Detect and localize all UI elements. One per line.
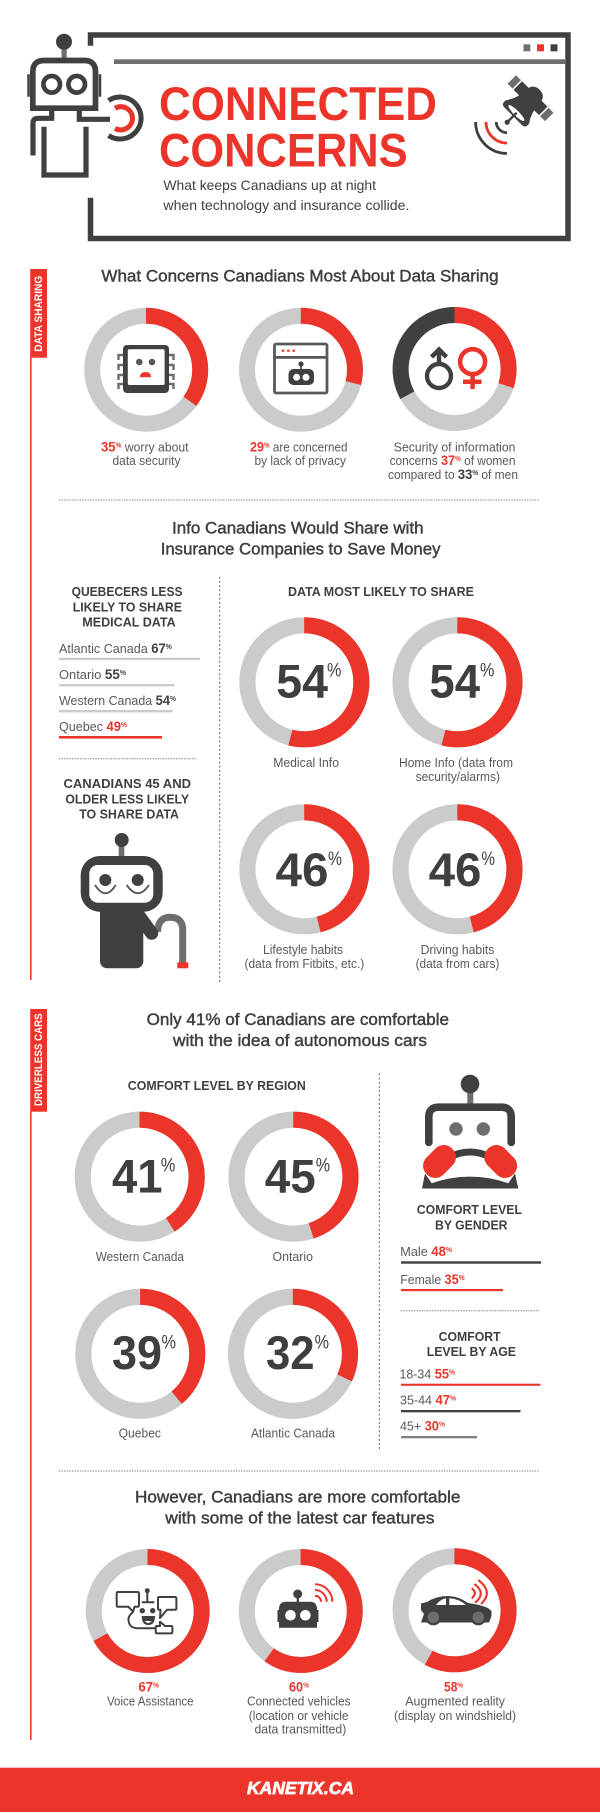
heading: info canadians would share: [161, 518, 441, 558]
caption: are concerned: [270, 439, 348, 454]
caption: 60: [289, 1680, 304, 1695]
subheading: [72, 585, 182, 629]
bar: western canada: Western Canada 54: [59, 693, 171, 708]
bar: ontario: Ontario 55: [59, 667, 120, 682]
stat: western canada 41%: [83, 1120, 197, 1264]
caption: 67: [138, 1680, 154, 1695]
stat: ontario 45%: 45: [265, 1149, 316, 1202]
subtitle: when technology and insurance collide.: [162, 197, 409, 213]
section tab: driverless cars: [30, 1009, 47, 1740]
stat: lifestyle habits 46%: 46: [276, 843, 328, 896]
stat: ontario 45%: [236, 1120, 350, 1264]
caption: 29: [250, 438, 264, 454]
caption: Security of information: [394, 439, 516, 454]
bar: 18-34: 18-34 55: [400, 1367, 450, 1382]
section tab: data sharing: [30, 269, 47, 980]
bar: ontario: [59, 667, 174, 686]
bar: 45+: [400, 1419, 477, 1438]
stat: driving habits 46%: (data from cars): [416, 956, 499, 971]
caption: by lack of privacy: [254, 453, 346, 468]
heading: info canadians would share: Info Canadians Would Share with: [172, 518, 424, 537]
title: CONCERNS: [159, 124, 408, 177]
stat: home info 54%: Home Info (data from: [399, 755, 513, 770]
panel: quebecers medical data: [59, 585, 200, 739]
caption: [247, 1680, 351, 1737]
subtitle: [162, 177, 409, 213]
caption: worry about: [121, 439, 189, 454]
subheading: QUEBECERS LESS: [72, 585, 182, 599]
panel: data most likely to share: [244, 585, 514, 971]
stat: home info 54%: 54: [429, 654, 480, 707]
stat: ontario 45%: %: [316, 1156, 330, 1177]
stat: atlantic canada 32%: 32: [266, 1326, 315, 1379]
icon: satellite: [476, 71, 558, 153]
bar: female: Female 35: [400, 1272, 460, 1287]
panel: augmented reality 58%: [394, 1556, 516, 1723]
stat: atlantic canada 32%: Atlantic Canada: [251, 1426, 336, 1441]
stat: western canada 41%: Western Canada: [96, 1249, 185, 1264]
stat: medical info 54%: 54: [276, 654, 328, 707]
caption: 35: [101, 438, 116, 454]
stat: driving habits 46%: Driving habits: [421, 942, 495, 957]
stat: quebec 39%: 39: [112, 1326, 162, 1379]
title: [159, 77, 437, 177]
icon: robot with signal: [278, 1584, 332, 1628]
stat: lifestyle habits 46%: %: [328, 849, 342, 870]
subheading: [64, 777, 191, 821]
caption: Augmented reality: [405, 1694, 505, 1709]
logo text: KANETIX.CA: [247, 1778, 354, 1798]
bar: atlantic canada: [59, 641, 200, 660]
bar: 35-44: [400, 1393, 520, 1412]
heading: car features: However, Canadians are more comfortable: [135, 1488, 460, 1507]
stat: medical info 54%: %: [327, 661, 341, 682]
stat: ontario 45%: Ontario: [272, 1249, 313, 1264]
donut chart: [94, 1557, 202, 1665]
stat: lifestyle habits 46%: Lifestyle habits: [263, 942, 343, 957]
caption: %: [455, 456, 462, 463]
subheading: DATA MOST LIKELY TO SHARE: [288, 585, 474, 599]
caption: %: [303, 1683, 310, 1690]
heading: autonomous cars: [147, 1010, 449, 1050]
heading: autonomous cars: with the idea of autonomous cars: [172, 1031, 427, 1050]
panel: comfort by region: [83, 1079, 350, 1441]
section tab: data sharing: DATA SHARING: [33, 276, 45, 352]
bar: 18-34: [400, 1367, 540, 1386]
bar: 45+: %: [439, 1422, 446, 1429]
icon: robot driving: [418, 1075, 522, 1188]
bar: male: [400, 1244, 541, 1264]
bar: quebec: [59, 719, 162, 739]
caption: [388, 439, 518, 482]
donut chart: [381, 296, 528, 442]
bar: 35-44: %: [450, 1396, 457, 1403]
heading: car features: with some of the latest car features: [164, 1509, 434, 1528]
icon: car with signal: [421, 1580, 492, 1625]
caption: of women: [461, 453, 516, 468]
caption: [250, 438, 348, 468]
caption: [107, 1680, 194, 1709]
bar: 45+: 45+ 30: [400, 1419, 440, 1434]
icon: browser robot: [274, 344, 327, 393]
bar: ontario: %: [120, 670, 127, 677]
stat: driving habits 46%: %: [481, 849, 495, 870]
stat: home info 54%: [399, 625, 514, 784]
bar: quebec: %: [121, 722, 128, 729]
panel: connected vehicles 60%: [247, 1557, 355, 1737]
caption: concerns 37: [390, 452, 457, 468]
caption: (display on windshield): [394, 1708, 516, 1723]
window buttons: [524, 44, 558, 51]
panel: voice assistance 67%: [94, 1557, 202, 1709]
panel: canadians 45 and older: [64, 777, 191, 968]
bar: female: %: [459, 1275, 465, 1282]
caption: Connected vehicles: [247, 1694, 351, 1709]
header panel: [28, 34, 568, 239]
bar: western canada: %: [170, 696, 177, 703]
caption: %: [264, 442, 270, 449]
donut chart: [92, 316, 200, 424]
donut chart: [401, 1556, 509, 1664]
subheading: age: [427, 1330, 516, 1359]
panel: privacy 29%: [247, 316, 355, 468]
stat: quebec 39%: Quebec: [119, 1426, 161, 1441]
bar: female: [400, 1272, 503, 1291]
bar: 35-44: 35-44 47: [400, 1393, 451, 1408]
stat: driving habits 46%: [400, 812, 514, 971]
heading: car features: [135, 1488, 460, 1528]
stat: lifestyle habits 46%: [244, 812, 364, 971]
bar: atlantic canada: %: [166, 644, 173, 651]
caption: [394, 1680, 516, 1723]
caption: compared to 33: [388, 466, 474, 482]
subheading: CANADIANS 45 AND: [64, 777, 191, 791]
section tab: driverless cars: DRIVERLESS CARS: [33, 1013, 45, 1106]
stat: medical info 54%: Medical Info: [273, 755, 339, 770]
heading: data sharing concerns: What Concerns Canadians Most About Data Sharing: [101, 267, 499, 286]
caption: Voice Assistance: [107, 1694, 194, 1709]
icon: male and female symbols: [427, 349, 485, 389]
bar: quebec: Quebec 49: [59, 719, 121, 734]
panel: data security 35%: [92, 316, 200, 468]
heading: info canadians would share: Insurance Companies to Save Money: [161, 539, 441, 558]
caption: %: [472, 470, 479, 477]
bar: male: Male 48: [400, 1244, 446, 1259]
caption: %: [457, 1683, 464, 1690]
caption: %: [116, 442, 122, 449]
caption: %: [153, 1683, 160, 1690]
stat: lifestyle habits 46%: (data from Fitbits, etc.): [244, 956, 364, 971]
subheading: COMFORT LEVEL BY REGION: [128, 1079, 306, 1093]
panel: comfort by gender and age: [400, 1075, 541, 1438]
stat: western canada 41%: %: [161, 1156, 175, 1177]
donut chart: [247, 316, 355, 424]
subtitle: What keeps Canadians up at night: [163, 177, 376, 193]
caption: of men: [478, 467, 518, 482]
stat: home info 54%: security/alarms): [416, 769, 500, 784]
subheading: age: LEVEL BY AGE: [427, 1345, 516, 1359]
icon: old robot with cane: [81, 833, 188, 968]
subheading: age: COMFORT: [439, 1330, 501, 1344]
icon: sad chip: [118, 345, 174, 393]
stat: quebec 39%: %: [162, 1332, 176, 1353]
subheading: MEDICAL DATA: [82, 615, 176, 629]
bar: atlantic canada: Atlantic Canada 67: [59, 641, 166, 656]
stat: atlantic canada 32%: [236, 1297, 350, 1441]
subheading: LIKELY TO SHARE: [73, 600, 182, 614]
stat: quebec 39%: [83, 1297, 197, 1441]
subheading: gender: BY GENDER: [435, 1218, 508, 1232]
browser window frame: [90, 35, 568, 238]
subheading: gender: COMFORT LEVEL: [417, 1203, 522, 1217]
heading: autonomous cars: Only 41% of Canadians are comfortable: [147, 1010, 449, 1029]
footer band: [0, 1768, 600, 1812]
donut chart: [247, 1557, 355, 1665]
icon: robot with speech bubbles: [117, 1588, 176, 1633]
bar: male: %: [446, 1247, 453, 1254]
stat: medical info 54%: [247, 625, 361, 770]
icon: robot touching target: [28, 34, 141, 175]
subheading: OLDER LESS LIKELY: [65, 792, 190, 806]
stat: western canada 41%: 41: [112, 1149, 163, 1202]
stat: driving habits 46%: 46: [429, 843, 481, 896]
subheading: gender: [417, 1203, 522, 1232]
caption: 58: [444, 1680, 459, 1695]
caption: [101, 438, 189, 468]
stat: home info 54%: %: [480, 661, 494, 682]
caption: data transmitted): [254, 1722, 346, 1737]
subheading: TO SHARE DATA: [79, 807, 179, 821]
bar: 18-34: %: [449, 1370, 456, 1377]
stat: atlantic canada 32%: %: [315, 1332, 329, 1353]
title: CONNECTED: [159, 77, 437, 130]
caption: data security: [112, 453, 181, 468]
window toolbar bar: [114, 59, 566, 64]
panel: gender security: [381, 296, 528, 482]
caption: (location or vehicle: [249, 1708, 349, 1723]
